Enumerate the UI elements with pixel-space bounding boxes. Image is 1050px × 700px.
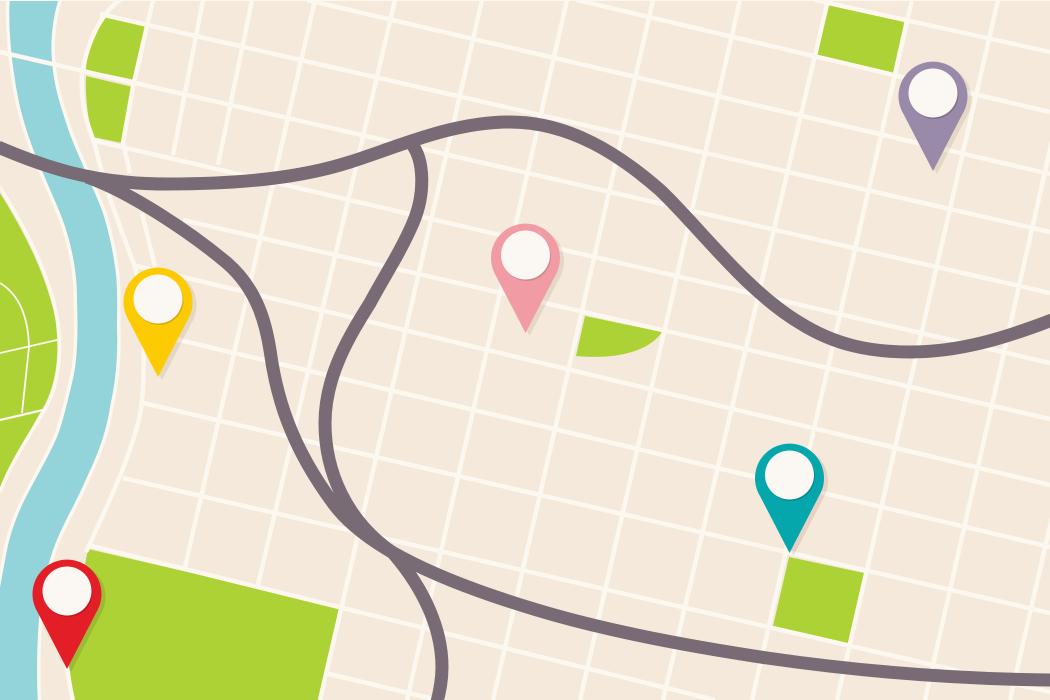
park: large bottom [69,549,339,700]
road: main east-west [0,122,1050,352]
far-left park outlines and paths [0,187,59,492]
pin: red [32,560,106,672]
pin: teal [755,444,828,556]
park: centre wedge [576,316,662,357]
pin: purple [898,62,972,174]
river banks and water [0,0,117,700]
park: lower right [773,557,864,643]
pin: yellow [124,268,196,380]
park: top left upper [86,16,147,80]
park: top left lower [86,76,133,143]
park: top right [817,3,905,73]
road: south-east branch [87,177,1050,680]
road: junction to south [325,143,442,700]
park: far left [0,193,57,490]
pin: pink [491,224,564,336]
